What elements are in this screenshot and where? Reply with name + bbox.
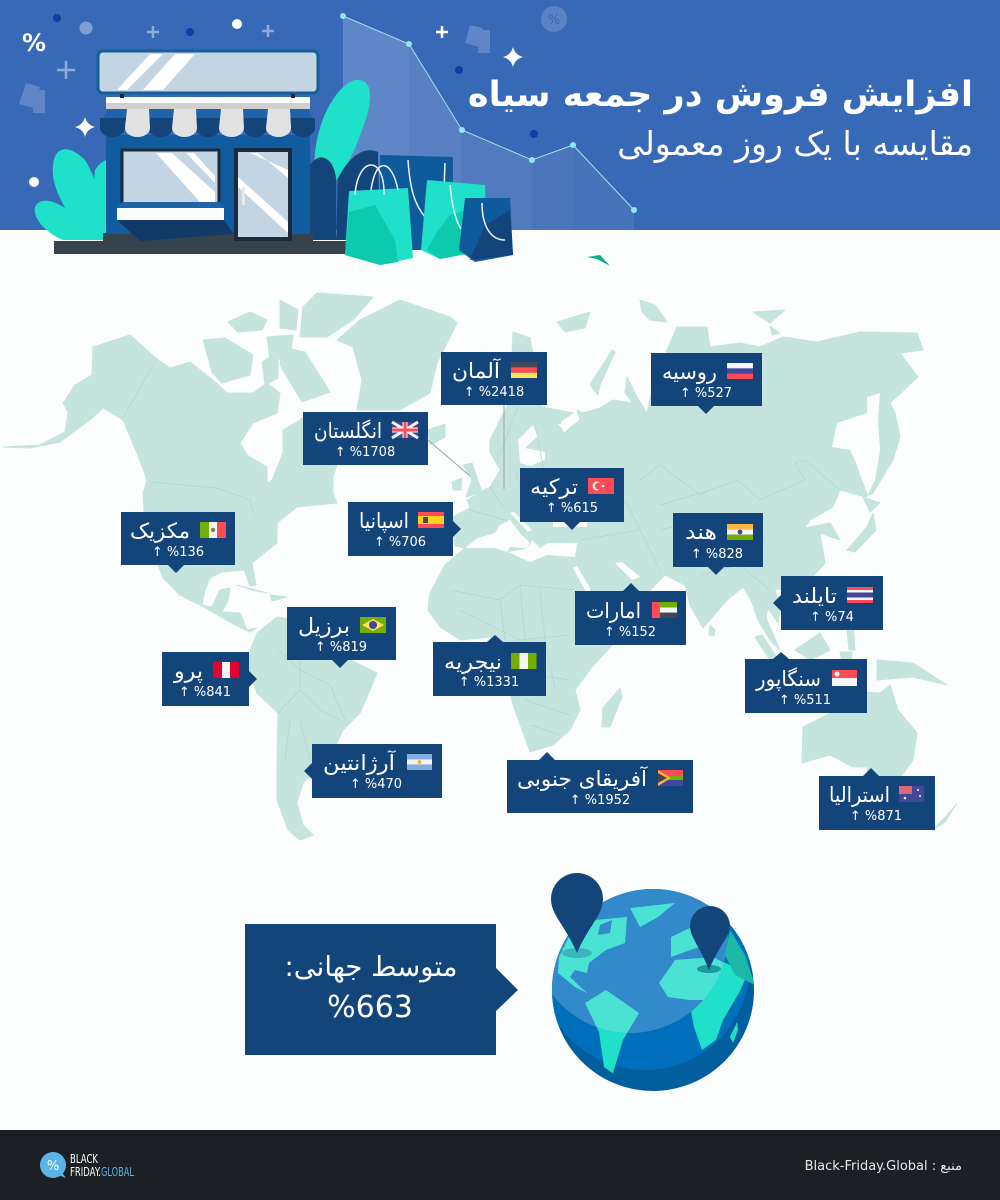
flag: germany [511,362,537,378]
australia [802,685,917,785]
label: turkey: ترکیه [530,475,578,499]
label: mexico [121,512,235,573]
flag: turkey [588,478,614,494]
label: united kingdom: ↑ %1708 [335,445,395,460]
label: mexico: مکزیک [130,519,190,543]
flag: russia [727,363,753,379]
label: australia: ↑ %871 [850,809,902,824]
globe icon [551,873,754,1091]
title: افزایش فروش در جمعه سیاه [468,75,973,115]
label: south africa [507,752,693,813]
label: emirates: امارات [586,599,641,623]
label: argentina: آرژانتین [323,750,396,775]
label: peru: ↑ %841 [179,685,231,700]
caribbean islands [237,585,287,601]
label: mexico: ↑ %136 [152,545,204,560]
logo: GLOBAL [101,1165,134,1179]
leader line: uk [428,440,470,476]
label: brazil: ↑ %819 [315,640,367,655]
label: russia [651,353,762,414]
label: singapore [745,652,867,713]
subtitle: مقایسه با یک روز معمولی [617,124,973,163]
line chart [340,13,637,230]
label: turkey [520,468,624,530]
label: spain: اسپانیا [359,509,409,533]
label: russia: ↑ %527 [680,386,732,401]
british isles [452,463,482,497]
label: emirates [575,583,686,645]
flag: uk [392,422,418,438]
northern islands [557,300,785,395]
flag: india [727,524,753,540]
flag: mexico [200,522,226,538]
leader line: germany [503,405,505,489]
north america [3,335,345,632]
label: argentina [304,744,442,798]
label: india: ↑ %828 [691,547,743,562]
inland seas [465,393,880,600]
logo: % [47,1159,59,1174]
decorative icons [19,6,567,187]
label: nigeria: نیجریه [444,650,502,674]
logo [40,1152,134,1179]
label: thailand: ↑ %74 [810,610,854,625]
label: united kingdom: انگلستان [314,419,382,443]
label: argentina: ↑ %470 [350,777,402,792]
eurasia and africa [428,327,923,752]
flag: nigeria [511,653,536,669]
flag: peru [213,662,239,678]
madagascar [602,688,622,727]
flag: south africa [658,770,683,786]
label: nigeria: ↑ %1331 [459,675,519,690]
label: india [673,513,763,575]
japan [847,497,880,552]
flag: thailand [847,587,873,603]
flag: spain [418,512,444,528]
flag: argentina [407,754,432,770]
label: brazil [287,607,396,668]
callout: global average: متوسط جهانی: [284,951,458,983]
world map [3,293,957,840]
south-east asia islands [709,625,947,685]
label: singapore: سنگاپور [755,667,821,691]
flag: singapore [832,670,857,686]
footer [0,1130,1000,1200]
shopping bags [345,155,513,265]
label: united kingdom [303,412,428,465]
label: india: هند [685,520,717,544]
storefront [54,51,349,254]
globe land [596,962,745,1077]
map pin right [690,906,730,973]
logo: FRIDAY. [70,1165,101,1179]
label: thailand [773,576,883,630]
label: thailand: تایلند [792,584,837,608]
map pin left [551,873,603,958]
flag: uae [652,602,677,618]
plants behind store [35,80,380,240]
label: australia [819,768,935,830]
iceland [428,424,445,445]
label: emirates: ↑ %152 [604,625,656,640]
label: peru: پرو [173,659,203,683]
greenland [337,300,457,410]
confetti sliver [587,255,610,266]
label: spain [348,502,461,556]
callout: global average: %663 [327,990,413,1025]
label: australia: استرالیا [829,783,890,807]
label: germany: ↑ %2418 [464,385,524,400]
callout: global average [245,924,518,1055]
label: south africa: آفریقای جنوبی [517,766,648,791]
label: germany: آلمان [452,358,501,383]
label: south africa: ↑ %1952 [570,793,630,808]
decorative icons: % [548,13,560,28]
label: nigeria [433,635,546,696]
logo: BLACK [70,1152,99,1166]
label: spain: ↑ %706 [374,535,426,550]
decorative icons: % [22,29,46,57]
source: Black-Friday.Global : منبع [805,1159,962,1174]
south america [248,617,377,840]
label: peru [162,652,257,706]
label: singapore: ↑ %511 [779,693,831,708]
label: germany [441,352,547,405]
label: russia: روسیه [662,360,717,384]
flag: australia [899,786,924,802]
label: turkey: ↑ %615 [546,501,598,516]
header banner [0,0,1000,265]
arctic islands [203,293,373,402]
flag: brazil [360,617,386,633]
country borders [123,358,840,760]
new zealand [933,803,957,830]
label: brazil: برزیل [298,614,350,638]
